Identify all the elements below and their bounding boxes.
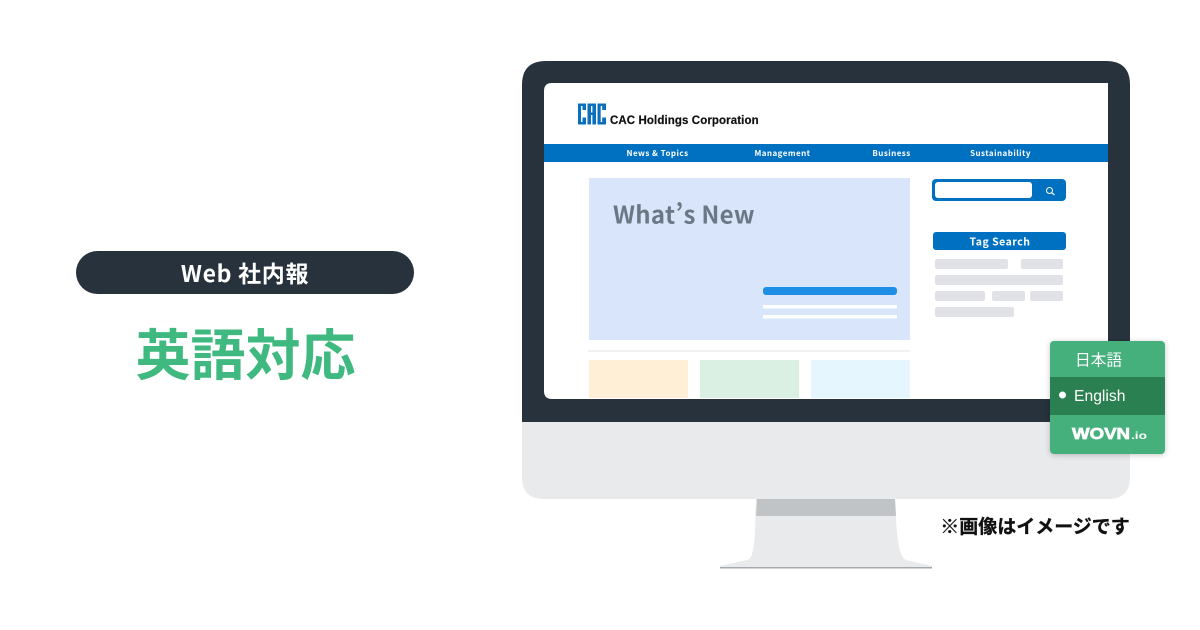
caption note: ※画像はイメージです: [940, 512, 1130, 539]
site logo: [578, 104, 759, 127]
hero panel: What's New: What’s New: [613, 196, 755, 230]
language switcher widget: [1050, 341, 1165, 454]
hero panel: What's New: [589, 178, 910, 340]
monitor: [522, 61, 1130, 568]
tag search heading: Tag Search: [969, 234, 1031, 250]
heading: 英語対応: 英語対応: [135, 311, 356, 391]
WOVN.io logo: .io: [1131, 431, 1147, 442]
article cards: [589, 360, 910, 398]
WOVN.io logo: [1072, 426, 1147, 443]
monitor chin: [522, 422, 1130, 499]
badge: Web 社内報: [76, 251, 414, 294]
site navigation bar: Management: [754, 148, 811, 159]
monitor bezel: [522, 61, 1130, 422]
option: 日本語: 日本語: [1075, 348, 1122, 370]
option: English (selected): English: [1074, 388, 1125, 405]
monitor screen: [544, 83, 1108, 399]
site navigation bar: Business: [872, 148, 911, 159]
site logo: CAC Holdings Corporation: [610, 115, 759, 127]
tag search heading: [933, 232, 1066, 250]
badge: Web 社内報: Web 社内報: [181, 255, 309, 289]
monitor stand: [720, 499, 932, 568]
site navigation bar: [544, 144, 1108, 162]
WOVN.io logo: WOVN: [1072, 426, 1130, 443]
tag placeholders: [935, 259, 1063, 317]
site navigation bar: Sustainability: [970, 148, 1031, 159]
search box: [932, 179, 1066, 201]
site navigation bar: News & Topics: [627, 148, 688, 159]
